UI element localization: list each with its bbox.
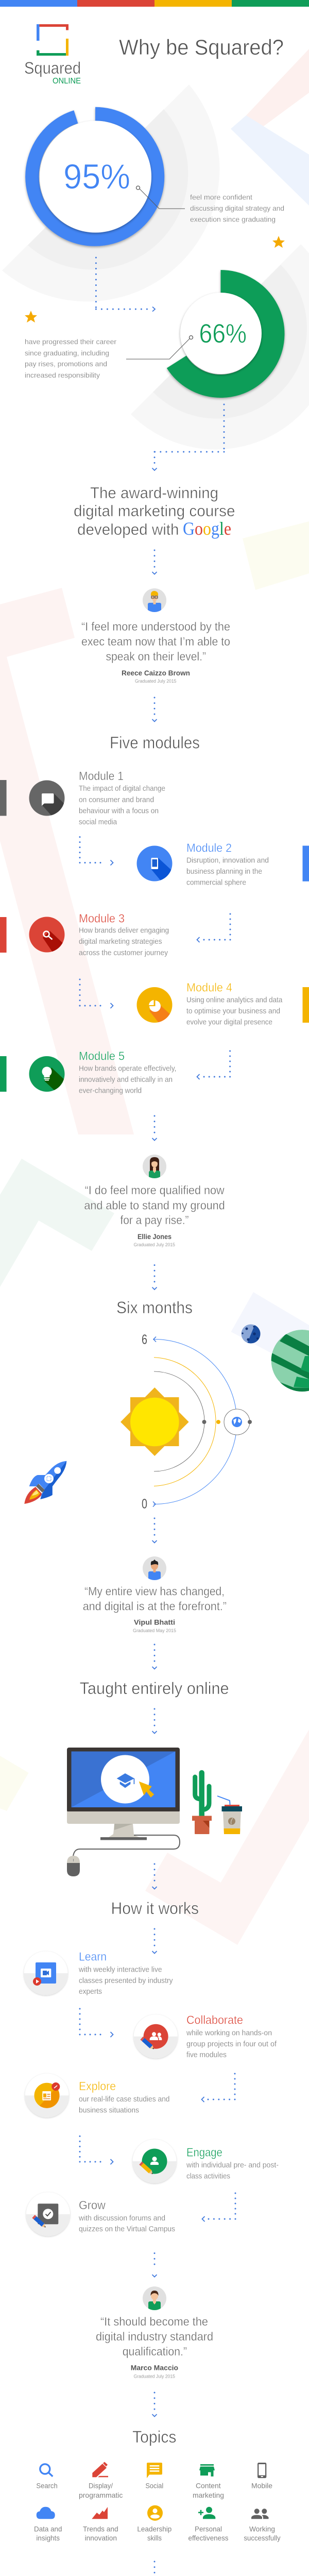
icon: mouse bbox=[67, 1856, 80, 1876]
avatar: Ellie bbox=[143, 1155, 166, 1179]
arrow bbox=[80, 2136, 113, 2164]
quote: Marco Maccio: Marco Maccio bbox=[131, 2364, 178, 2372]
topic: Leadership skills: Leadership bbox=[137, 2524, 172, 2533]
arrow bbox=[152, 1518, 157, 1543]
arrow bbox=[80, 2009, 113, 2037]
heading: award-winning course: The award-winning bbox=[90, 484, 218, 502]
panel: Collaborate bbox=[133, 2013, 277, 2059]
panel: module 1: on consumer and brand bbox=[79, 795, 154, 804]
donut chart: 66% bbox=[126, 281, 273, 386]
panel: module 5 bbox=[0, 1049, 176, 1095]
heading: award-winning course: digital marketing course bbox=[74, 502, 235, 520]
topic: Working successfully: successfully bbox=[244, 2534, 281, 2542]
arrow: 66% to heading bbox=[152, 404, 224, 470]
panel: module 2: Module 2 bbox=[186, 841, 232, 854]
quote: Vipul Bhatti bbox=[83, 1584, 227, 1633]
arrow bbox=[197, 1051, 230, 1079]
panel: Explore: business situations bbox=[79, 2106, 139, 2114]
topic: Personal effectiveness: effectiveness bbox=[188, 2534, 229, 2542]
panel: Learn: with weekly interactive live bbox=[78, 1965, 162, 1974]
topic: Trends and innovation bbox=[83, 2507, 118, 2542]
panel: module 2 bbox=[137, 841, 309, 889]
icon: cursor bbox=[139, 1782, 154, 1798]
chart: six months solar system bbox=[121, 1332, 252, 1512]
topic: Trends and innovation: innovation bbox=[85, 2534, 117, 2542]
arrow bbox=[152, 550, 157, 574]
panel: Grow bbox=[26, 2192, 175, 2237]
callout: 66% description bbox=[25, 337, 116, 379]
avatar: Marco bbox=[143, 2286, 166, 2311]
logo: Squared Online bbox=[24, 24, 81, 86]
heading: Five modules: Five modules bbox=[110, 734, 200, 752]
quote: Reece Caizzo Brown: speak on their level.” bbox=[106, 650, 206, 663]
panel: module 1: The impact of digital change bbox=[79, 784, 165, 793]
quote: Marco Maccio bbox=[96, 2315, 213, 2379]
panel: module 3: digital marketing strategies bbox=[79, 937, 162, 946]
callout: 66% description: since graduating, including bbox=[25, 349, 109, 357]
icon: earth bbox=[232, 1417, 242, 1427]
panel: Grow: Grow bbox=[79, 2198, 106, 2212]
quote: Marco Maccio: qualification.” bbox=[123, 2345, 187, 2358]
quote: Ellie Jones: Ellie Jones bbox=[138, 1232, 171, 1241]
chart: six months solar system: 6 bbox=[142, 1332, 147, 1347]
quote: Reece Caizzo Brown bbox=[81, 620, 230, 684]
heading: award-winning course bbox=[74, 484, 235, 539]
arrow bbox=[152, 2562, 157, 2576]
donut chart: 95%: 95% bbox=[63, 157, 130, 196]
panel: module 4 bbox=[137, 983, 309, 1026]
topic: Personal effectiveness: Personal bbox=[195, 2524, 222, 2533]
topic: Data and insights: Data and bbox=[34, 2524, 62, 2533]
quote: Ellie Jones bbox=[84, 1183, 225, 1247]
quote: Reece Caizzo Brown: exec team now that I’m able to bbox=[81, 635, 230, 648]
panel: Engage bbox=[132, 2139, 279, 2184]
donut chart: 95% bbox=[32, 114, 158, 239]
quote: Reece Caizzo Brown: Reece Caizzo Brown bbox=[122, 669, 190, 677]
chart: six months solar system: 0 bbox=[142, 1496, 147, 1512]
panel: Collaborate: Collaborate bbox=[186, 2013, 243, 2027]
panel: Grow: with discussion forums and bbox=[78, 2214, 165, 2223]
quote: Ellie Jones: Graduated July 2015 bbox=[134, 1242, 175, 1247]
arrow: 95% to 66% bbox=[96, 258, 155, 311]
icon: pencil bbox=[32, 2215, 47, 2229]
panel: module 3 bbox=[0, 912, 169, 958]
panel: module 5: innovatively and ethically in an bbox=[79, 1075, 173, 1084]
quote: Ellie Jones: “I do feel more qualified now bbox=[85, 1183, 225, 1197]
panel: module 4: evolve your digital presence bbox=[186, 1018, 272, 1026]
panel: module 4: Using online analytics and data bbox=[186, 995, 283, 1005]
panel: Learn: classes presented by industry bbox=[79, 1976, 173, 1985]
panel: module 3: Module 3 bbox=[79, 912, 125, 925]
panel: Collaborate: while working on hands-on bbox=[186, 2029, 272, 2037]
arrow bbox=[152, 1864, 157, 1889]
topic: Social: Social bbox=[145, 2481, 163, 2489]
callout: 66% description: have progressed their career bbox=[25, 337, 116, 346]
icon: green planet bbox=[271, 1330, 309, 1392]
heading: award-winning course: developed with bbox=[77, 520, 179, 538]
top colour bar bbox=[0, 0, 309, 7]
quote: Vipul Bhatti: “My entire view has changed, bbox=[84, 1584, 225, 1598]
icon: star right bbox=[272, 236, 285, 248]
panel: module 5: ever-changing world bbox=[79, 1086, 142, 1095]
arrow bbox=[152, 1709, 157, 1733]
topic: Leadership skills bbox=[137, 2505, 172, 2542]
icon: graduation cap bbox=[117, 1773, 134, 1788]
panel: Collaborate: group projects in four out of bbox=[186, 2040, 277, 2048]
panel: Learn bbox=[24, 1950, 173, 1996]
arrow bbox=[152, 2253, 157, 2277]
icon: moon bbox=[241, 1324, 261, 1344]
quote: Vipul Bhatti: and digital is at the forefront.” bbox=[83, 1599, 227, 1613]
topic: Data and insights: insights bbox=[36, 2534, 60, 2542]
quote: Ellie Jones: for a pay rise.” bbox=[121, 1213, 188, 1227]
logo: Squared Online: ONLINE bbox=[53, 77, 81, 86]
background shapes bbox=[0, 49, 309, 1945]
panel: Engage: with individual pre- and post- bbox=[186, 2161, 279, 2170]
quote: Marco Maccio: Graduated July 2015 bbox=[134, 2374, 175, 2379]
panel: Explore: our real-life case studies and bbox=[79, 2095, 170, 2104]
panel: Grow: quizzes on the Virtual Campus bbox=[79, 2225, 175, 2233]
illustration: cactus bbox=[192, 1773, 212, 1834]
donut chart: 66%: 66% bbox=[199, 319, 247, 349]
quote: Marco Maccio: digital industry standard bbox=[96, 2330, 213, 2343]
panel: module 5: Module 5 bbox=[79, 1049, 125, 1063]
panel: module 1 bbox=[0, 769, 165, 826]
callout: 66% description: increased responsibility bbox=[25, 371, 100, 379]
topic: Personal effectiveness bbox=[188, 2507, 229, 2542]
avatar: Vipul bbox=[143, 1556, 166, 1581]
panel: Engage: Engage bbox=[186, 2146, 222, 2159]
quote: Reece Caizzo Brown: Graduated July 2015 bbox=[135, 679, 176, 684]
arrow bbox=[152, 698, 157, 721]
arrow bbox=[152, 1265, 157, 1290]
icon: pencil bbox=[140, 2037, 155, 2050]
avatar: Reece bbox=[143, 588, 166, 613]
panel: Explore bbox=[25, 2074, 170, 2118]
quote: Marco Maccio: “It should become the bbox=[100, 2315, 208, 2328]
heading: Topics: Topics bbox=[132, 2428, 176, 2446]
arrow bbox=[80, 837, 113, 866]
logo: Squared Online: Squared bbox=[24, 59, 81, 77]
topic: Mobile: Mobile bbox=[251, 2481, 272, 2489]
heading: Taught entirely online: Taught entirely online bbox=[80, 1679, 229, 1698]
arrow bbox=[152, 1116, 157, 1141]
panel: module 3: How brands deliver engaging bbox=[79, 926, 169, 935]
arrow bbox=[152, 1929, 157, 1954]
topic: Trends and innovation: Trends and bbox=[83, 2524, 118, 2533]
heading: How it works: How it works bbox=[111, 1899, 199, 1918]
panel: module 1: Module 1 bbox=[79, 769, 124, 783]
panel: module 5: How brands operate effectively, bbox=[79, 1064, 176, 1073]
topic: Search bbox=[36, 2464, 58, 2489]
callout: 95% description: discussing digital strategy and bbox=[190, 204, 284, 212]
panel: module 1: social media bbox=[79, 818, 117, 826]
icon: sun bbox=[121, 1387, 189, 1456]
topic: Leadership skills: skills bbox=[147, 2534, 162, 2542]
topic: Search: Search bbox=[36, 2481, 58, 2489]
panel: Learn: Learn bbox=[79, 1950, 107, 1963]
topic: Content marketing: marketing bbox=[193, 2491, 224, 2499]
topic: Display/programmatic: programmatic bbox=[79, 2491, 123, 2499]
arrow bbox=[202, 2193, 235, 2222]
heading: award-winning course: Google bbox=[183, 518, 231, 539]
panel: module 2: commercial sphere bbox=[186, 878, 246, 887]
arrow bbox=[152, 1645, 157, 1669]
panel: module 4: to optimise your business and bbox=[186, 1007, 280, 1015]
topic: Content marketing: Content bbox=[196, 2481, 221, 2489]
illustration: desktop computer bbox=[67, 1748, 180, 1876]
panel: Engage: class activities bbox=[186, 2172, 230, 2181]
panel: module 1: behaviour with a focus on bbox=[79, 807, 159, 816]
callout: 95% description: execution since graduating bbox=[190, 215, 276, 224]
topic: Data and insights bbox=[34, 2507, 62, 2542]
callout: 95% description bbox=[136, 186, 284, 224]
heading: Six months: Six months bbox=[116, 1298, 193, 1317]
topic: Display/programmatic bbox=[79, 2462, 123, 2499]
panel: module 2: Disruption, innovation and bbox=[186, 856, 269, 865]
icon: star left bbox=[25, 311, 37, 323]
topic: Working successfully bbox=[244, 2509, 281, 2542]
panel: module 3: across the customer journey bbox=[79, 948, 168, 957]
topic: Display/programmatic: Display/ bbox=[89, 2481, 113, 2489]
panel: module 4: Module 4 bbox=[186, 981, 232, 994]
quote: Ellie Jones: and able to stand my ground bbox=[84, 1198, 225, 1212]
panel: module 2: business planning in the bbox=[186, 867, 262, 876]
quote: Vipul Bhatti: Vipul Bhatti bbox=[134, 1618, 175, 1626]
callout: 66% description: pay rises, promotions and bbox=[25, 360, 107, 368]
quote: Reece Caizzo Brown: “I feel more understood by the bbox=[81, 620, 230, 633]
quote: Vipul Bhatti: Graduated May 2015 bbox=[133, 1628, 176, 1633]
panel: Learn: experts bbox=[79, 1987, 102, 1996]
topic: Mobile bbox=[251, 2463, 272, 2489]
panel: Collaborate: five modules bbox=[186, 2050, 227, 2059]
topic: Content marketing bbox=[193, 2464, 224, 2499]
panel: Explore: Explore bbox=[79, 2079, 116, 2093]
topic: Social bbox=[145, 2463, 163, 2489]
title: Why be Squared? bbox=[119, 35, 284, 59]
arrow bbox=[202, 2074, 235, 2102]
callout: 95% description: feel more confident bbox=[190, 193, 252, 201]
illustration: coffee cup bbox=[217, 1796, 242, 1834]
icon: rocket bbox=[24, 1461, 66, 1504]
arrow bbox=[80, 979, 113, 1008]
topic: Working successfully: Working bbox=[249, 2524, 275, 2533]
arrow bbox=[197, 914, 230, 942]
icon: pencil bbox=[139, 2162, 154, 2176]
arrow bbox=[152, 2393, 157, 2416]
